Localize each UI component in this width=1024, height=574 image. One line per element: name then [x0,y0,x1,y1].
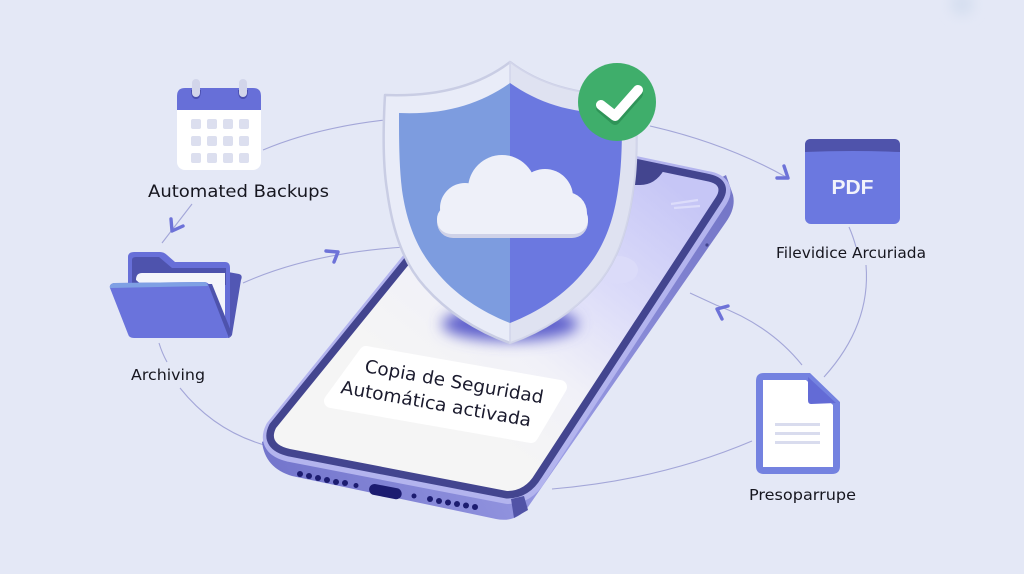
shield right half [510,83,622,323]
icon: document [756,373,840,474]
arrow: folder to shield [326,251,338,262]
phone corner facet [511,496,528,518]
status message panel [331,353,560,436]
label: Presoparrupe: Presoparrupe [749,486,856,504]
label: Filevidice Arcuriada: Filevidice Arcuriada [776,244,926,262]
status message text: Automática activada [339,377,533,431]
shield outer frame [384,62,636,343]
icon: folder [110,252,242,338]
side buttons [705,243,709,247]
icon: PDF tile: PDF [832,177,874,199]
phone body side [262,175,734,520]
shield [384,62,656,343]
shadow under shield [442,307,578,341]
connector arcs [159,120,866,489]
faint cloud on screen [598,256,638,284]
arrow: document to phone [717,306,728,319]
arrow: calendar to folder [171,219,183,231]
icon: green check badge [578,63,656,141]
icon: cloud [437,155,588,238]
phone notch [628,161,664,185]
icon: calendar [177,79,261,170]
icon: PDF tile [805,139,900,224]
screen status lines [671,200,700,208]
label: Archiving: Archiving [131,366,205,384]
phone [262,140,734,520]
status message text: Copia de Seguridad [363,356,545,408]
arrow: shield to PDF [777,166,788,178]
phone bezel [274,140,718,491]
label: Automated Backups: Automated Backups [148,182,329,202]
shield frame right shade [510,62,636,343]
phone screen [274,140,718,491]
shield left half [399,83,510,323]
status message text [339,356,545,431]
speaker and port [297,471,478,510]
phone front rim [274,142,719,492]
